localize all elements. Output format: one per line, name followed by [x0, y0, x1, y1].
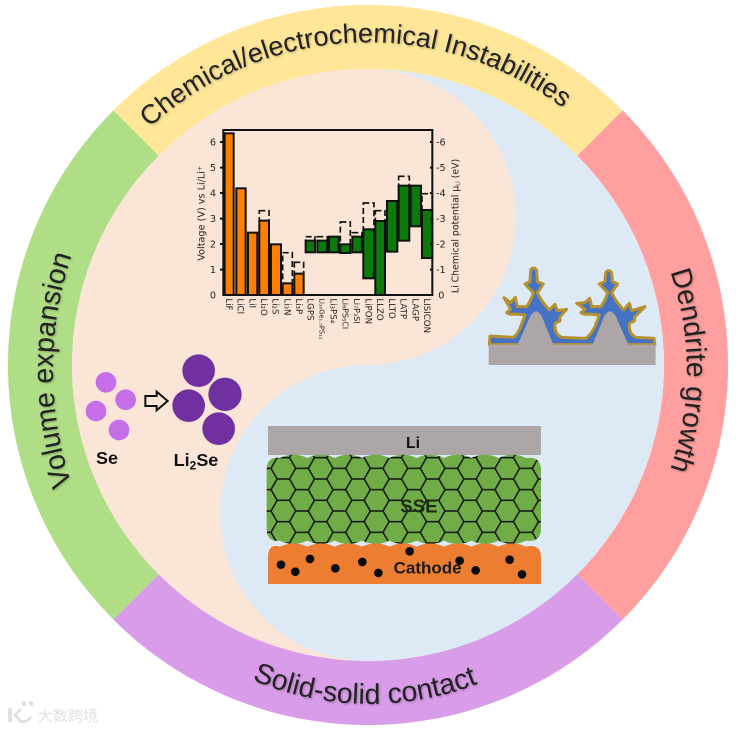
compound labels: LiPON — [363, 298, 373, 324]
watermark — [8, 701, 98, 725]
heading: solid-solid contact: Solid-solid contact — [254, 664, 480, 706]
compound labels: Li₆PS₅Cl — [340, 298, 349, 329]
Se particles — [86, 372, 136, 440]
left axis tick labels: 6 — [210, 137, 216, 148]
green bars: solid electrolytes — [306, 186, 432, 295]
label: SSE: SSE — [400, 495, 438, 516]
compound labels: LAGP — [409, 298, 419, 321]
right axis title: Li — [455, 181, 461, 186]
honeycomb grains — [267, 455, 541, 544]
cathode particles — [277, 547, 526, 579]
label: Se: Se — [96, 448, 118, 468]
ring segment: volume expansion — [8, 110, 159, 620]
compound labels: LLTO — [386, 298, 396, 319]
right axis tick labels: -5 — [436, 163, 446, 174]
compound labels — [223, 298, 431, 340]
compound labels: LiCl — [235, 298, 245, 314]
right axis title: (eV) — [450, 159, 461, 181]
left axis tick labels: 5 — [210, 163, 216, 174]
left axis tick labels: 4 — [210, 188, 216, 199]
label: Li2Se: Se — [196, 450, 218, 470]
dendrite growth shape — [489, 268, 655, 345]
ring segment: solid-solid contact — [113, 574, 623, 725]
inner circle: blue half — [72, 69, 664, 661]
cell stack diagram — [267, 426, 541, 584]
right axis tick labels: -2 — [436, 239, 446, 250]
right axis tick labels: -3 — [436, 214, 446, 225]
compound labels: LISICON — [421, 298, 431, 333]
dendrite diagram — [489, 268, 656, 365]
right axis title: Li Chemical potential µ — [450, 186, 461, 293]
left axis tick labels: 1 — [210, 265, 216, 276]
compound labels: Li₂S — [270, 298, 280, 315]
right axis tick labels: 0 — [438, 290, 444, 301]
right axis tick labels: -1 — [436, 265, 446, 276]
heading: chemical instabilities: Chemical/electrochemical Instabilities — [142, 24, 571, 126]
watermark logo — [8, 701, 34, 723]
left axis tick labels: 2 — [210, 239, 216, 250]
compound labels: LiI — [246, 298, 256, 308]
label: Li2Se: Li — [174, 450, 190, 470]
dashed bars: extended windows — [259, 176, 432, 283]
compound labels: Li₃N — [281, 298, 291, 316]
substrate peaks — [489, 311, 656, 365]
left axis title: Voltage (V) vs Li/Li⁺ — [197, 166, 208, 261]
label: cathode: Cathode — [394, 558, 462, 577]
compound labels: Li₃P — [293, 298, 303, 314]
label: Li: Li — [406, 435, 420, 452]
left axis tick labels — [210, 137, 216, 301]
compound labels: LATP — [397, 298, 407, 319]
right axis tick labels — [436, 137, 446, 301]
volume expansion diagram — [86, 354, 242, 472]
ring segment: chemical/electrochemical instabilities — [113, 5, 623, 156]
heading: volume expansion: Volume expansion — [38, 254, 72, 492]
compound labels: Li₇P₃SI — [352, 298, 361, 324]
solid electrolyte layer — [267, 455, 541, 544]
Li2Se particles — [172, 354, 242, 445]
right axis tick labels: -6 — [436, 137, 446, 148]
compound labels: LiF — [223, 298, 233, 311]
ring segment: dendrite growth — [577, 110, 728, 620]
left axis tick labels: 3 — [210, 214, 216, 225]
compound labels: Li₂O — [258, 298, 268, 316]
cathode layer — [268, 543, 541, 584]
heading: dendrite growth: Dendrite growth — [670, 268, 709, 473]
compound labels: LLZO — [374, 298, 384, 321]
arrow: Se to Li2Se — [145, 392, 168, 410]
label: Li2Se: 2 — [190, 458, 197, 472]
bar chart: voltage windows — [197, 130, 461, 340]
compound labels: LGPS — [304, 298, 314, 321]
compound labels: Li₁₀Ge₁.₅PS₁₂ — [317, 298, 325, 340]
left axis tick labels: 0 — [210, 290, 216, 301]
lithium layer — [268, 426, 541, 455]
orange bars: binary compounds — [225, 133, 304, 295]
watermark text: 大数跨境 — [38, 707, 98, 725]
inner circle: peach half — [72, 69, 516, 661]
chart axes frame — [220, 130, 432, 295]
compound labels: Li₃PS₄ — [328, 298, 338, 324]
right axis tick labels: -4 — [436, 188, 446, 199]
